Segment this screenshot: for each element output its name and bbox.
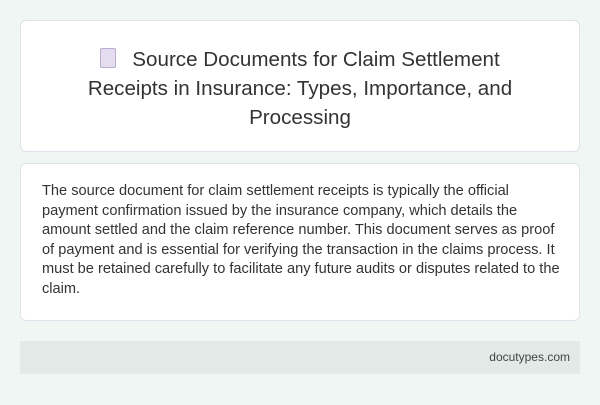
title xyxy=(88,48,512,129)
title: Receipts in Insurance: Types, Importance, and xyxy=(88,77,512,100)
description text: of payment and is essential for verifying the transaction in the claims process. It xyxy=(42,242,555,258)
description panel xyxy=(20,163,580,321)
footer text: docutypes.com xyxy=(489,350,570,364)
title card xyxy=(20,20,580,152)
description text: The source document for claim settlement receipts is typically the official xyxy=(42,183,509,199)
description text: payment confirmation issued by the insurance company, which details the xyxy=(42,202,517,218)
description text xyxy=(42,183,560,296)
description text: must be retained carefully to facilitate any future audits or disputes related to the xyxy=(42,261,560,277)
description text: claim. xyxy=(42,280,80,296)
footer xyxy=(20,341,580,374)
description text: amount settled and the claim reference number. This document serves as proof xyxy=(42,222,554,238)
icon: receipt xyxy=(100,48,116,68)
title: Processing xyxy=(249,106,351,129)
title: Source Documents for Claim Settlement xyxy=(132,48,500,71)
